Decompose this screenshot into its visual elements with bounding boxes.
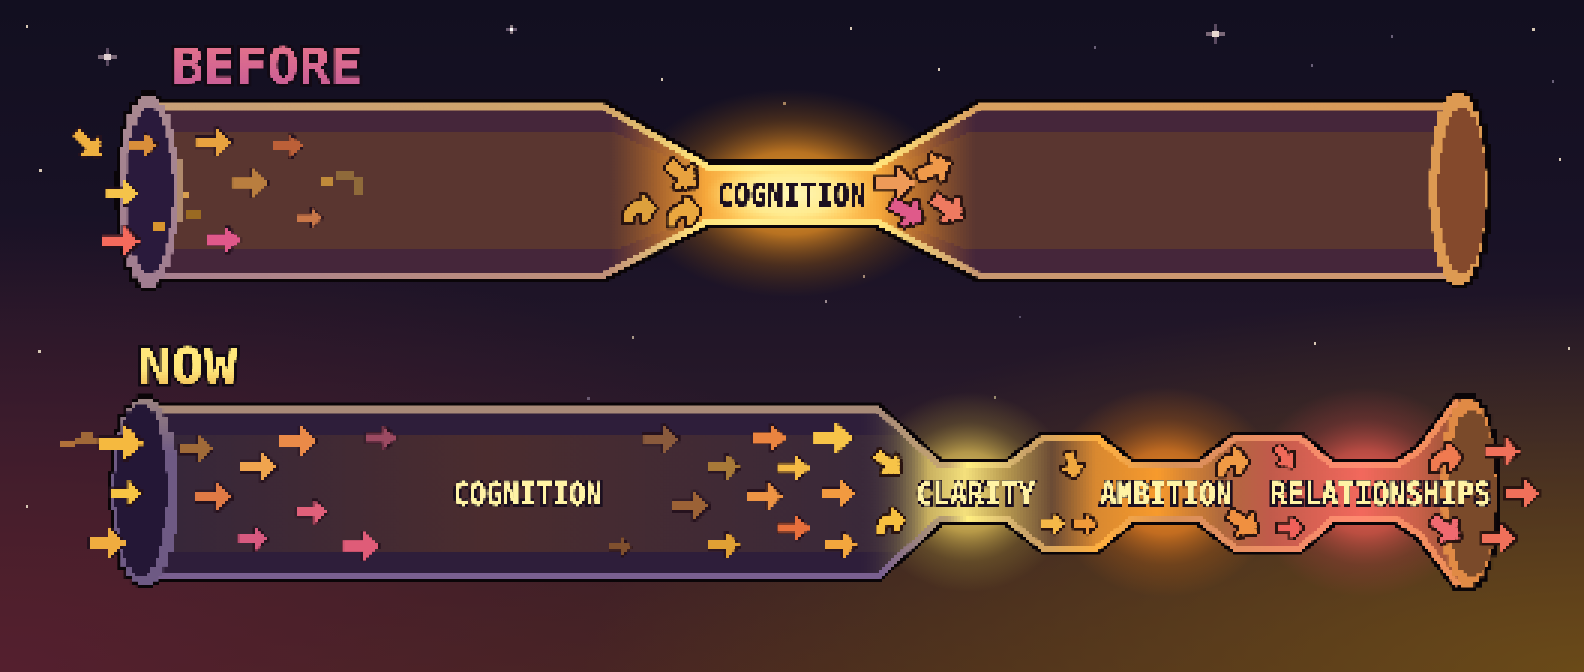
arrow [1042, 515, 1064, 533]
arrow [668, 197, 700, 226]
pipe right opening [1430, 93, 1486, 285]
arrow [1059, 450, 1085, 480]
glow: clarity [863, 392, 1073, 592]
arrows exiting the pipe [1482, 438, 1539, 551]
pipe left opening [112, 398, 178, 584]
heading: BEFORE: BEFORE [172, 38, 362, 95]
arrow [876, 168, 914, 198]
arrow [297, 500, 327, 524]
label: clarity: CLARITY [916, 475, 1036, 513]
arrow [1431, 444, 1461, 472]
arrows in the chambers [1042, 441, 1467, 549]
arrow [753, 426, 785, 450]
arrow [926, 187, 970, 229]
arrows scattering after the bottleneck [876, 149, 970, 233]
arrow [241, 453, 277, 481]
arrow [180, 436, 212, 462]
arrow [869, 444, 907, 482]
pipe body [108, 394, 1501, 590]
trailing arrow fragments [61, 433, 101, 447]
arrows crowding the bottleneck [624, 153, 704, 226]
arrow [1482, 525, 1516, 551]
arrow [129, 134, 157, 156]
arrow [779, 456, 809, 480]
arrow [779, 516, 809, 540]
arrow [1486, 438, 1520, 464]
panel: now pipe [61, 387, 1539, 597]
arrow [99, 426, 143, 460]
arrow [239, 528, 267, 550]
heading: NOW: NOW [138, 338, 238, 395]
arrow [366, 426, 396, 450]
label: ambition: AMBITION [1100, 475, 1232, 513]
arrow [298, 209, 322, 227]
pipe body [115, 90, 1492, 291]
arrow [89, 529, 125, 557]
arrow [111, 481, 141, 505]
arrow [709, 533, 739, 557]
arrow: entering diagonal [67, 123, 109, 165]
arrows flowing through wide pipe [89, 423, 907, 560]
arrow [1278, 518, 1302, 538]
panel: before pipe [67, 89, 1492, 297]
arrow [233, 169, 267, 197]
arrow [709, 455, 739, 479]
arrow [912, 149, 956, 189]
arrow [344, 532, 378, 560]
broken arrow fragments [154, 172, 362, 230]
arrow [197, 128, 231, 156]
arrow [826, 533, 856, 557]
glow behind cognition bottleneck [630, 89, 950, 297]
arrow [1269, 441, 1301, 473]
arrow [280, 427, 316, 455]
arrow [107, 181, 137, 205]
label: relationships: RELATIONSHIPS [1270, 475, 1491, 513]
arrow [102, 227, 140, 255]
arrow [609, 538, 631, 556]
arrow [624, 194, 656, 223]
glow: relationships [1250, 387, 1480, 597]
label: cognition bottleneck: COGNITION [717, 176, 866, 214]
pipe left opening [119, 95, 183, 287]
arrow [208, 228, 240, 252]
arrow [644, 425, 678, 453]
arrow [814, 423, 852, 453]
arrow [885, 191, 929, 233]
pipe right opening [1440, 398, 1496, 586]
arrow [1218, 448, 1248, 476]
arrow [1222, 503, 1264, 543]
arrow [274, 135, 302, 157]
incoming and drifting arrows [67, 123, 362, 255]
arrow [823, 481, 855, 505]
starfield [26, 24, 1570, 508]
arrow [673, 492, 709, 520]
arrow [1505, 480, 1539, 506]
glow: ambition [1050, 387, 1280, 597]
arrow [196, 483, 232, 511]
arrow [1425, 509, 1467, 549]
arrow [660, 153, 704, 197]
arrow [748, 483, 782, 509]
arrow [877, 508, 905, 533]
arrow [1074, 515, 1096, 533]
label: cognition: COGNITION [453, 475, 602, 513]
